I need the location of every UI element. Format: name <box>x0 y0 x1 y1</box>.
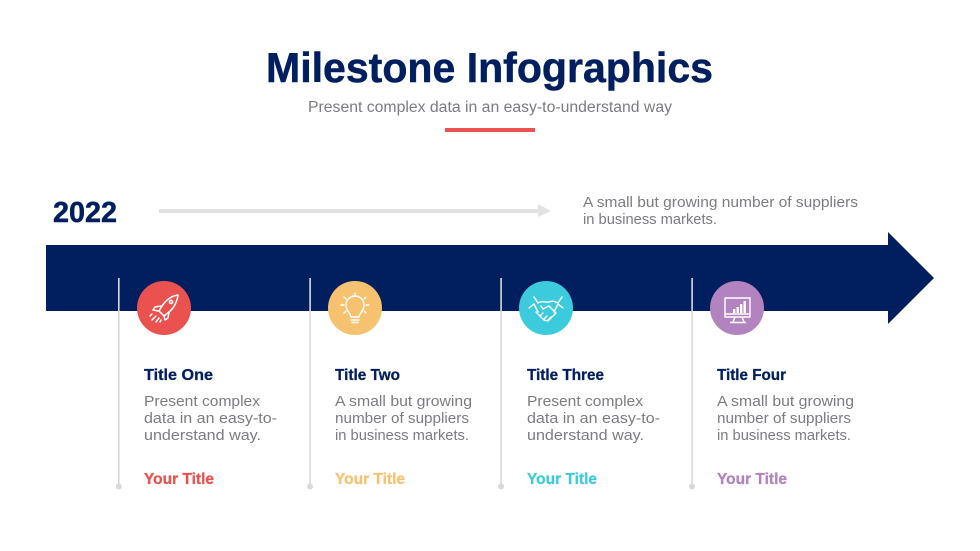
text block: description two <box>335 394 472 444</box>
text block: description four <box>717 394 854 444</box>
text block: timeline note: A small but growing number of suppliers <box>583 195 858 211</box>
panel: milestone three <box>498 278 660 490</box>
vertical marker line three <box>498 278 504 490</box>
vertical marker line four <box>689 278 695 490</box>
panel: milestone two <box>307 278 472 490</box>
arrow: thin grey timeline pointer <box>159 204 551 217</box>
text block: description three: data in an easy-to- <box>527 411 660 427</box>
text block: description four: number of suppliers <box>717 411 851 427</box>
text block: description three: Present complex <box>527 394 644 410</box>
text block: description four: in business markets. <box>717 428 851 444</box>
heading: Title Two: Title Two <box>335 367 400 384</box>
heading: Title Four: Title Four <box>717 367 786 384</box>
label: Your Title purple: Your Title <box>717 471 787 488</box>
year label: 2022 <box>53 197 117 229</box>
icon: handshake <box>519 281 573 335</box>
icon: rocket <box>137 281 191 335</box>
text block: description one: data in an easy-to- <box>144 411 277 427</box>
panel: milestone four <box>689 278 854 490</box>
panel: milestone one <box>116 278 277 490</box>
label: Your Title yellow: Your Title <box>335 471 405 488</box>
heading: Title One: Title One <box>144 367 213 384</box>
vertical marker line two <box>307 278 313 490</box>
icon: light bulb <box>328 281 382 335</box>
arrow: main navy timeline <box>46 232 934 324</box>
text block: description two: number of suppliers <box>335 411 469 427</box>
title accent underline <box>445 128 535 132</box>
label: Your Title red: Your Title <box>144 471 214 488</box>
text block: description one: understand way. <box>144 428 261 444</box>
text block: description three: understand way. <box>527 428 644 444</box>
text block: timeline note <box>583 195 858 228</box>
text block: timeline note: in business markets. <box>583 212 717 228</box>
vertical marker line one <box>116 278 122 490</box>
heading: Title Three: Title Three <box>527 367 604 384</box>
text block: description two: in business markets. <box>335 428 469 444</box>
title: Milestone Infographics <box>266 44 713 91</box>
text block: description one: Present complex <box>144 394 261 410</box>
text block: description four: A small but growing <box>717 394 854 410</box>
icon: monitor with chart <box>710 281 764 335</box>
subtitle: Present complex data in an easy-to-understand way <box>308 99 672 116</box>
text block: description three <box>527 394 660 444</box>
text block: description one <box>144 394 277 444</box>
text block: description two: A small but growing <box>335 394 472 410</box>
label: Your Title cyan: Your Title <box>527 471 597 488</box>
